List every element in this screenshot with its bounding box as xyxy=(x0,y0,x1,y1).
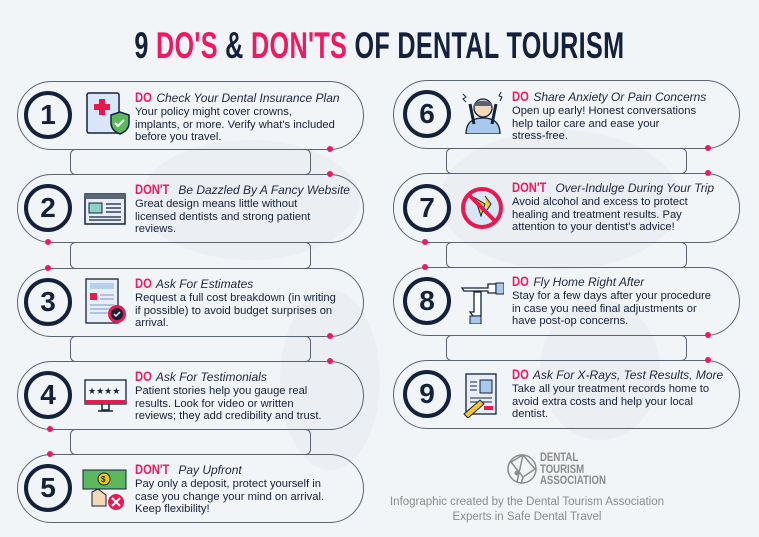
icon: stop hands xyxy=(460,282,504,324)
text 2: reviews. xyxy=(135,223,176,235)
text 3: Request a full cost breakdown (in writing xyxy=(135,292,336,304)
number 7: 7 xyxy=(419,192,435,223)
logo: DENTAL xyxy=(540,450,578,464)
text 3 xyxy=(135,275,336,329)
text 1: implants, or more. Verify what's included xyxy=(135,119,335,131)
text 9: Take all your treatment records home to xyxy=(512,383,709,395)
number 9: 9 xyxy=(419,378,435,409)
text 9: DO xyxy=(512,366,529,382)
logo: ASSOCIATION xyxy=(540,473,606,487)
icon: website xyxy=(84,193,126,225)
text 6: stress-free. xyxy=(512,130,568,142)
number 6 xyxy=(403,90,451,138)
text 4: Ask For Testimonials xyxy=(156,370,267,384)
text 7: Avoid alcohol and excess to protect xyxy=(512,196,688,208)
number 8 xyxy=(403,277,451,325)
logo: TOURISM xyxy=(540,462,584,476)
text 2: Great design means little without xyxy=(135,198,297,210)
text 8: have post-op concerns. xyxy=(512,315,628,327)
text 5: case you change your mind on arrival. xyxy=(135,491,324,503)
text 1: Your policy might cover crowns, xyxy=(135,106,292,118)
text 2: licensed dentists and strong patient xyxy=(135,211,310,223)
icon: monitor reviews: ★★★★ xyxy=(88,386,120,396)
number 2 xyxy=(24,184,72,232)
text 3: if possible) to avoid budget surprises on xyxy=(135,305,332,317)
text 5: Pay only a deposit, protect yourself in xyxy=(135,478,321,490)
text 6: Share Anxiety Or Pain Concerns xyxy=(533,90,706,104)
text 2: Be Dazzled By A Fancy Website xyxy=(178,183,350,197)
text 3: DO xyxy=(135,275,152,291)
number 4 xyxy=(24,371,72,419)
icon: no alcohol xyxy=(461,187,503,229)
icon: money xyxy=(82,470,126,510)
text 7: Over-Indulge During Your Trip xyxy=(555,181,714,195)
number 9 xyxy=(403,370,451,418)
logo xyxy=(507,450,606,487)
text 7: healing and treatment results. Pay xyxy=(512,209,682,221)
text 7: DON'T xyxy=(512,179,546,195)
text 8: DO xyxy=(512,273,529,289)
footer text: Experts in Safe Dental Travel xyxy=(453,511,601,523)
text 4 xyxy=(135,368,322,422)
text 8: Fly Home Right After xyxy=(533,275,644,289)
text 5: Pay Upfront xyxy=(178,463,242,477)
text 8 xyxy=(512,273,711,327)
text 3: Ask For Estimates xyxy=(156,277,253,291)
icon: records xyxy=(463,373,497,418)
text 5 xyxy=(135,461,324,515)
icon: estimate xyxy=(85,278,126,324)
text 6: DO xyxy=(512,88,529,104)
number 2: 2 xyxy=(40,192,56,223)
text 6: Open up early! Honest conversations xyxy=(512,105,696,117)
number 6: 6 xyxy=(419,98,435,129)
number 7 xyxy=(403,184,451,232)
text 9 xyxy=(512,366,723,420)
text 1: DO xyxy=(135,89,152,105)
icon: money: $ xyxy=(101,475,106,484)
number 5 xyxy=(24,464,72,512)
icon: anxiety xyxy=(462,92,503,134)
text 5: DON'T xyxy=(135,461,169,477)
text 3: arrival. xyxy=(135,317,169,329)
text 7: attention to your dentist’s advice! xyxy=(512,221,675,233)
text 1: before you travel. xyxy=(135,131,221,143)
text 4: results. Look for video or written xyxy=(135,398,294,410)
text 4: DO xyxy=(135,368,152,384)
text 9: dentist. xyxy=(512,408,548,420)
icon: insurance xyxy=(86,92,130,135)
text 2: DON'T xyxy=(135,181,169,197)
text 4: Patient stories help you gauge real xyxy=(135,385,307,397)
number 5: 5 xyxy=(40,472,56,503)
text 4: reviews; they add credibility and trust. xyxy=(135,410,322,422)
text 7 xyxy=(512,179,714,233)
number 1: 1 xyxy=(40,99,56,130)
text 8: in case you need final adjustments or xyxy=(512,303,697,315)
number 3: 3 xyxy=(40,286,56,317)
icon: monitor reviews xyxy=(84,379,127,412)
text 5: Keep flexibility! xyxy=(135,503,210,515)
text 9: Ask For X-Rays, Test Results, More xyxy=(533,368,723,382)
number 3 xyxy=(24,278,72,326)
text 9: avoid extra costs and help your local xyxy=(512,396,693,408)
text 1: Check Your Dental Insurance Plan xyxy=(156,91,340,105)
footer text xyxy=(390,496,664,523)
text 1 xyxy=(135,89,340,143)
text 6: help tailor care and ease your xyxy=(512,118,659,130)
number 8: 8 xyxy=(419,285,435,316)
text 8: Stay for a few days after your procedure xyxy=(512,290,711,302)
footer text: Infographic created by the Dental Tourism Association xyxy=(390,496,664,508)
text 2 xyxy=(135,181,350,235)
text 6 xyxy=(512,88,706,142)
number 4: 4 xyxy=(40,379,56,410)
title: 9 DO'S & DON'TS OF DENTAL TOURISM xyxy=(134,25,625,66)
number 1 xyxy=(24,91,72,139)
